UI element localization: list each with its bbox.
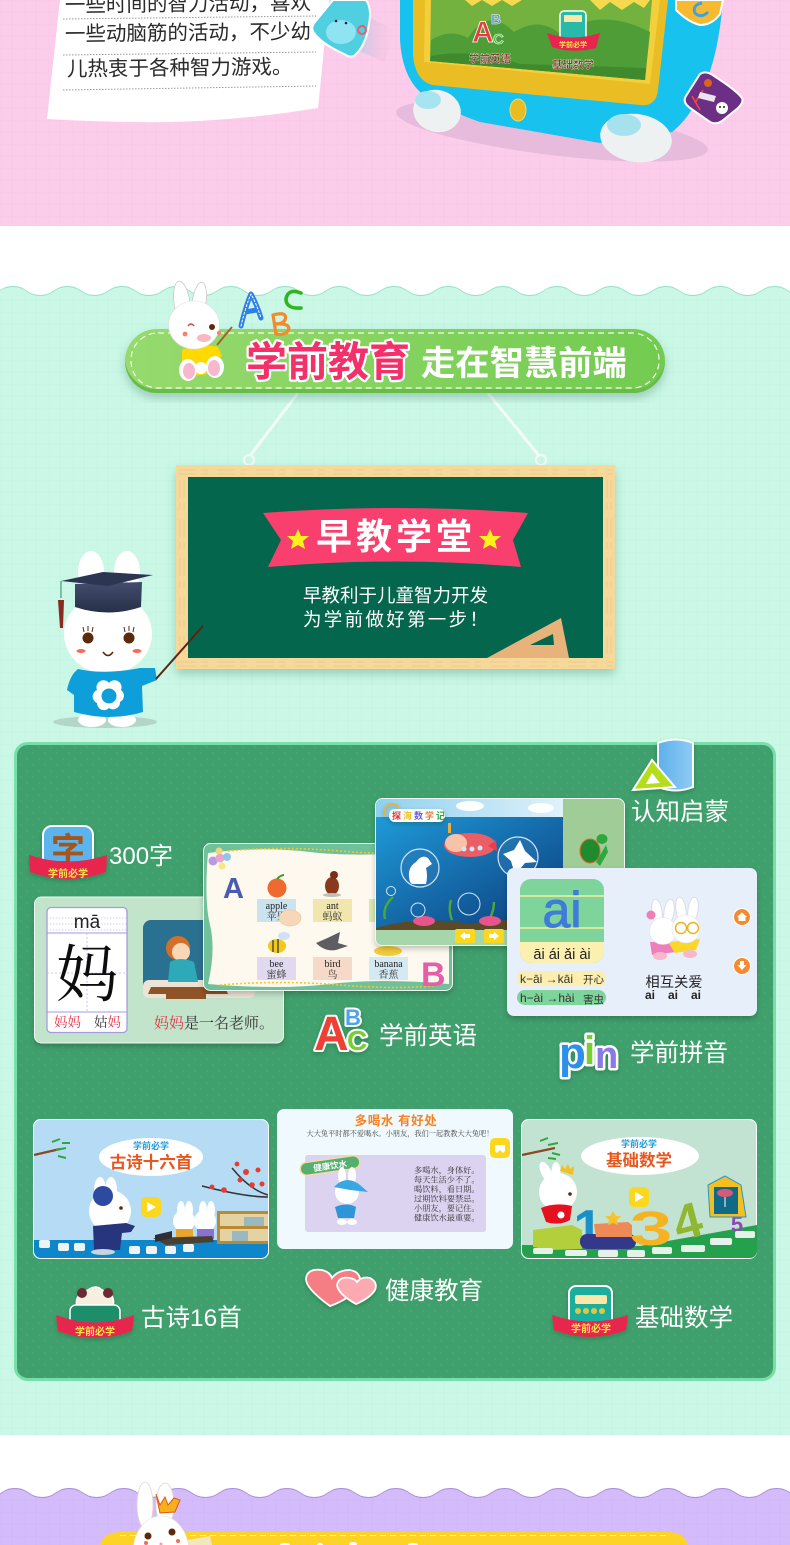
- panel: purple next section: [0, 1482, 790, 1545]
- label: 古诗16首: 古诗16首: [141, 1304, 242, 1332]
- 相互关爱: 相互关爱: [645, 974, 703, 991]
- water poem: [414, 1165, 480, 1222]
- board subtitle: 为学前做好第一步！: [303, 609, 490, 630]
- turtle: [580, 834, 608, 866]
- cloud title: 学前必学: [621, 1138, 657, 1149]
- ground: [522, 1225, 757, 1258]
- bookshelf: [217, 1211, 268, 1244]
- teacher picture: [143, 920, 255, 999]
- tag: 健康饮水: [313, 1159, 348, 1173]
- 相互关爱: ai: [691, 988, 701, 1002]
- writing grid: 妈: [56, 942, 118, 1010]
- word: ant: [313, 871, 352, 923]
- play button: [629, 1187, 649, 1207]
- number 4: 4: [667, 1191, 708, 1252]
- play button: [141, 1197, 161, 1217]
- device: blue learning tablet: [393, 0, 742, 174]
- button: home: [734, 908, 750, 926]
- icon: 字 badge: [29, 826, 107, 880]
- label: 健康教育: 健康教育: [385, 1277, 483, 1305]
- word: bird: [313, 932, 352, 981]
- plum blossom: [202, 1168, 268, 1197]
- stones: [533, 1231, 755, 1257]
- sticker: cyan rabbit card: [312, 0, 395, 62]
- pointing hand: [279, 910, 301, 926]
- screen icon: ABC: B: [491, 11, 501, 27]
- yellow banner top: [100, 1532, 688, 1545]
- icon: calculator badge: 学前必学: [571, 1322, 611, 1335]
- purple poem panel: [305, 1155, 486, 1232]
- word: ant: 蚂蚁: [322, 910, 342, 923]
- yellow face icon: [490, 1138, 510, 1158]
- word: bee: bee: [270, 959, 284, 970]
- card: basic math: [522, 1120, 757, 1258]
- icon: 字 badge: 字: [51, 832, 85, 870]
- note paper: [47, 0, 329, 122]
- game title: 学: [425, 810, 434, 821]
- icon: ABC badge: C: [347, 1025, 367, 1056]
- panel: pink top section: [0, 0, 790, 226]
- health intro: 大大兔平时都不爱喝水。小朋友，我们一起教教大大兔吧！: [307, 1129, 493, 1139]
- word: banana: [369, 946, 408, 981]
- water poem: 健康饮水最重要。: [414, 1212, 480, 1222]
- icon: pin letters: p: [559, 1029, 586, 1078]
- tablet body: [400, 0, 723, 143]
- 相互关爱: ai: [645, 988, 655, 1002]
- word: hidden cell: [369, 899, 408, 922]
- word: apple: [257, 875, 296, 923]
- label: 学前英语: 学前英语: [379, 1022, 477, 1050]
- word: apple: apple: [266, 901, 288, 912]
- wood frame: [176, 465, 615, 669]
- board subtitle: 早教利于儿童智力开发: [303, 585, 488, 606]
- water poem: 小朋友，要记住。: [414, 1203, 480, 1214]
- cloud title: [581, 1137, 699, 1175]
- 相互关爱: [645, 974, 703, 1002]
- hanging strings: [244, 393, 546, 465]
- word: bee: 蜜蜂: [266, 968, 286, 981]
- icon: poem bag badge: 学前必学: [75, 1325, 115, 1338]
- word: ant: ant: [326, 901, 339, 912]
- screen icon: calculator: [547, 11, 600, 51]
- example k: 开心: [583, 974, 604, 986]
- screen label: 基础数学: 基础数学: [552, 58, 594, 71]
- icon: cognition cylinder and triangle: [633, 740, 693, 790]
- icon: hearts: [306, 1270, 376, 1306]
- card: 300 characters: [34, 897, 284, 1043]
- screen icon: ABC: A: [472, 16, 494, 49]
- note text: [65, 0, 311, 81]
- screen icon: ABC: [472, 11, 504, 49]
- heading banner: 学前教育 走在智慧前端: [125, 329, 665, 393]
- tablet feet: [408, 85, 675, 167]
- water poem: 多喝水，身体好。: [414, 1165, 480, 1176]
- example k: [517, 971, 606, 986]
- icon: calculator badge: [552, 1286, 628, 1337]
- card: health education: [277, 1109, 513, 1249]
- seabed: [376, 886, 563, 930]
- character: teacher rabbit: [53, 551, 203, 728]
- board subtitle: [303, 585, 490, 630]
- game title: 海: [403, 810, 412, 821]
- cloud title: [99, 1138, 203, 1176]
- balloons: [208, 848, 231, 870]
- word: apple: 苹果: [266, 910, 286, 923]
- label: 基础数学: 基础数学: [635, 1304, 733, 1332]
- two rabbits: [646, 896, 700, 960]
- pinyin letters tile: āi ái ǎi ài: [533, 947, 591, 963]
- game title: 数: [414, 810, 423, 821]
- word: bird: bird: [324, 959, 341, 970]
- icon: ABC badge: [314, 1005, 367, 1061]
- icon: ABC badge: A: [314, 1008, 349, 1061]
- capped rabbit: [334, 1167, 368, 1225]
- example h: h−ài →hài: [520, 991, 574, 1005]
- blue shirt: [67, 668, 157, 717]
- water poem: 过期饮料要禁忌。: [414, 1194, 480, 1204]
- bubble: bear: [401, 849, 439, 887]
- submarine: [444, 823, 497, 857]
- orange box: [594, 1211, 632, 1237]
- card: pinyin: [507, 868, 757, 1016]
- game title: 探: [392, 810, 401, 821]
- face: [76, 626, 142, 656]
- label: 300字: 300字: [109, 843, 173, 870]
- nav arrows: [455, 929, 504, 943]
- letter A: A: [223, 873, 244, 905]
- green board: [188, 477, 603, 658]
- icon: pin letters: n: [595, 1035, 618, 1077]
- tag: [299, 1155, 361, 1176]
- health title: 多喝水 有好处: [355, 1113, 437, 1128]
- icon: ABC badge: B: [345, 1005, 361, 1030]
- label: 认知启蒙: 认知启蒙: [631, 798, 729, 826]
- graduation cap: [58, 572, 153, 628]
- writing grid: 妈妈: [54, 1015, 81, 1030]
- yellow home button: [510, 99, 526, 121]
- character: rabbit on banner: [168, 280, 232, 381]
- pinyin letters tile: [520, 879, 604, 963]
- card: cognition ocean game: [376, 798, 624, 946]
- icon: poem bag badge: [56, 1287, 134, 1338]
- word: bee: [257, 932, 296, 981]
- writing grid: 姑妈: [94, 1015, 122, 1030]
- ruler: [487, 618, 569, 658]
- word: bird: 鸟: [328, 968, 338, 981]
- card: english words: [204, 844, 452, 994]
- label: 学前拼音: 学前拼音: [630, 1039, 728, 1067]
- note text: 一些动脑筋的活动，不少幼: [65, 20, 311, 46]
- star right: [479, 529, 501, 549]
- word: banana: 香蕉: [378, 968, 398, 981]
- icon: pin letters: [559, 1029, 618, 1078]
- note text: 儿热衷于各种智力游戏。: [67, 56, 293, 81]
- icon: stitched ABC letters: [241, 291, 301, 335]
- left branch: [34, 1139, 70, 1158]
- heading white words: 走在智慧前端: [421, 345, 627, 383]
- icon: pin letters: i: [584, 1029, 595, 1073]
- number 5: 5: [731, 1212, 743, 1237]
- example h: [517, 990, 606, 1006]
- bubble: starfish: [498, 837, 538, 877]
- tablet screen: [430, 0, 652, 80]
- number 1: 1: [574, 1200, 602, 1258]
- board title: 早教学堂: [316, 516, 476, 557]
- tablet shadow: [393, 88, 711, 174]
- card: ancient poems: [34, 1120, 268, 1258]
- character: crowned rabbit: [133, 1482, 212, 1545]
- panel: mint section background: [0, 285, 790, 1435]
- heading pink words: 学前教育: [246, 339, 410, 385]
- pinyin letters tile: ai: [543, 882, 581, 938]
- crowned rabbit: [537, 1160, 577, 1224]
- example k: k−āi →kāi: [520, 972, 573, 986]
- cloud title: 古诗十六首: [110, 1152, 192, 1172]
- water poem: 喝饮料，看日期。: [414, 1184, 480, 1195]
- sentence: 妈妈是一名老师。: [154, 1014, 274, 1032]
- star left: [287, 529, 309, 549]
- pointer stick: [156, 626, 203, 679]
- icon: 字 badge: 学前必学: [48, 867, 88, 880]
- cloud title: 学前必学: [133, 1140, 169, 1151]
- game title: [384, 804, 445, 822]
- letter B: B: [421, 956, 446, 994]
- sticker: yellow G card: [676, 0, 723, 25]
- screen icon: ABC: C: [493, 31, 504, 48]
- pink ribbon: [263, 508, 528, 567]
- pupil rabbits and desk: [153, 1201, 216, 1245]
- chalkboard: [176, 465, 615, 669]
- writing grid: mā: [74, 912, 101, 933]
- panel: green courses board: [16, 740, 774, 1380]
- yellow frame: [413, 0, 668, 105]
- screen label: 学前英语: 学前英语: [469, 52, 511, 65]
- sticker: purple night card: [685, 72, 742, 123]
- ground shadow: [53, 716, 157, 728]
- green box: [533, 1225, 582, 1250]
- navy roll: [580, 1234, 636, 1249]
- cloud title: 基础数学: [606, 1150, 672, 1170]
- 相互关爱: ai: [668, 988, 678, 1002]
- stepping stones: [39, 1240, 194, 1254]
- example h: 害虫: [583, 993, 604, 1006]
- framed house: [708, 1176, 746, 1217]
- poet rabbit: [89, 1177, 135, 1255]
- screen icon: calculator: 学前必学: [559, 40, 587, 49]
- water poem: 每天生活少不了。: [414, 1174, 480, 1184]
- button: down: [734, 958, 750, 974]
- writing grid: [47, 908, 127, 1032]
- branch: [522, 1138, 560, 1159]
- number 3: 3: [630, 1202, 672, 1255]
- game title: 记: [436, 811, 445, 821]
- word: banana: banana: [374, 959, 403, 970]
